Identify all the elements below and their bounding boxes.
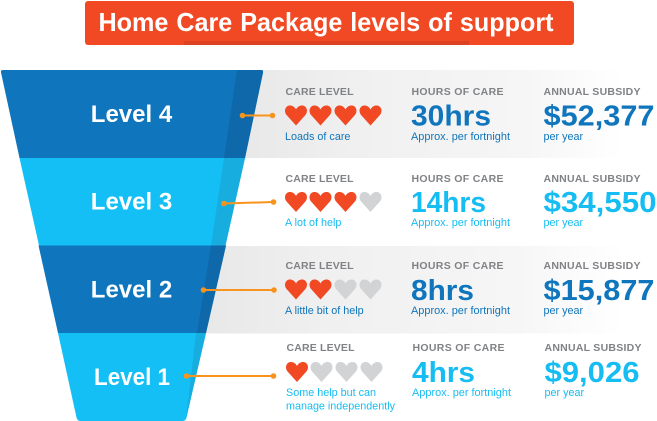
connector: level 3 — [221, 199, 276, 206]
hours: level 3: 14hrs — [411, 187, 486, 219]
funnel band: level 1 — [58, 333, 206, 421]
title banner: Home Care Package levels of support — [98, 7, 554, 37]
subsidy: level 1: ANNUAL SUBSIDY — [544, 342, 642, 354]
hours: level 2: Approx. per fortnight — [411, 305, 510, 317]
title banner — [85, 1, 574, 45]
care level: level 1: CARE LEVEL — [286, 342, 355, 354]
hours: level 1 — [412, 342, 511, 399]
connector: level 1 — [184, 373, 276, 379]
funnel band: level 2: Level 2 — [91, 276, 172, 304]
subsidy: level 3: per year — [544, 217, 584, 229]
funnel band: level 3: Level 3 — [91, 188, 172, 216]
subsidy: level 3 — [544, 173, 656, 229]
hours: level 4: 30hrs — [411, 100, 491, 132]
funnel band: level 2 — [38, 246, 226, 333]
care level: level 4: Loads of care — [285, 131, 350, 143]
subsidy: level 4: per year — [544, 131, 584, 143]
funnel band: level 4 — [1, 70, 263, 158]
hours: level 1: 4hrs — [412, 357, 475, 389]
funnel band: level 4: Level 4 — [91, 101, 173, 128]
connector: level 4 — [240, 113, 275, 118]
hours: level 3 — [411, 173, 510, 229]
row: level 3 — [285, 173, 656, 229]
hours: level 3: Approx. per fortnight — [411, 217, 510, 229]
care level: level 1: manage independently — [286, 400, 396, 412]
funnel — [1, 70, 263, 421]
hours: level 2: HOURS OF CARE — [412, 260, 504, 272]
care level: level 2: A little bit of help — [285, 305, 364, 317]
row: level 1 — [286, 342, 642, 412]
subsidy: level 2: $15,877 — [544, 275, 654, 307]
subsidy: level 3: $34,550 — [544, 187, 656, 219]
hours: level 1: HOURS OF CARE — [412, 342, 504, 354]
hours: level 4 — [411, 86, 510, 143]
care level: level 4: CARE LEVEL — [286, 86, 354, 98]
hours: level 3: HOURS OF CARE — [412, 173, 504, 185]
care level: level 2 — [285, 260, 381, 317]
connector: level 2 — [201, 287, 277, 293]
subsidy: level 3: ANNUAL SUBSIDY — [544, 173, 640, 185]
subsidy: level 1: per year — [544, 387, 585, 399]
funnel band: level 3 — [20, 158, 245, 246]
row background: level 4 — [240, 70, 622, 158]
subsidy: level 4: ANNUAL SUBSIDY — [544, 86, 640, 98]
hours: level 4: Approx. per fortnight — [411, 131, 510, 143]
care level: level 3: CARE LEVEL — [286, 173, 354, 185]
care level: level 1 — [286, 342, 396, 412]
funnel band: level 1: Level 1 — [94, 364, 170, 391]
care level: level 4 — [285, 86, 381, 143]
care level: level 3: A lot of help — [285, 217, 341, 229]
subsidy: level 4: $52,377 — [544, 100, 654, 132]
subsidy: level 4 — [544, 86, 654, 143]
hours: level 1: Approx. per fortnight — [412, 387, 511, 399]
care level: level 3 — [285, 173, 381, 229]
hours: level 2 — [411, 260, 510, 317]
subsidy: level 1 — [544, 342, 642, 399]
care level: level 1: Some help but can — [286, 387, 376, 399]
row: level 2 — [285, 260, 654, 317]
subsidy: level 2 — [544, 260, 654, 317]
subsidy: level 2: per year — [544, 305, 584, 317]
care level: level 2: CARE LEVEL — [286, 260, 354, 272]
hours: level 2: 8hrs — [411, 275, 474, 307]
row background: level 2 — [205, 246, 622, 334]
subsidy: level 1: $9,026 — [544, 357, 640, 389]
subsidy: level 2: ANNUAL SUBSIDY — [544, 260, 640, 272]
hours: level 4: HOURS OF CARE — [412, 86, 504, 98]
row: level 4 — [285, 86, 654, 143]
